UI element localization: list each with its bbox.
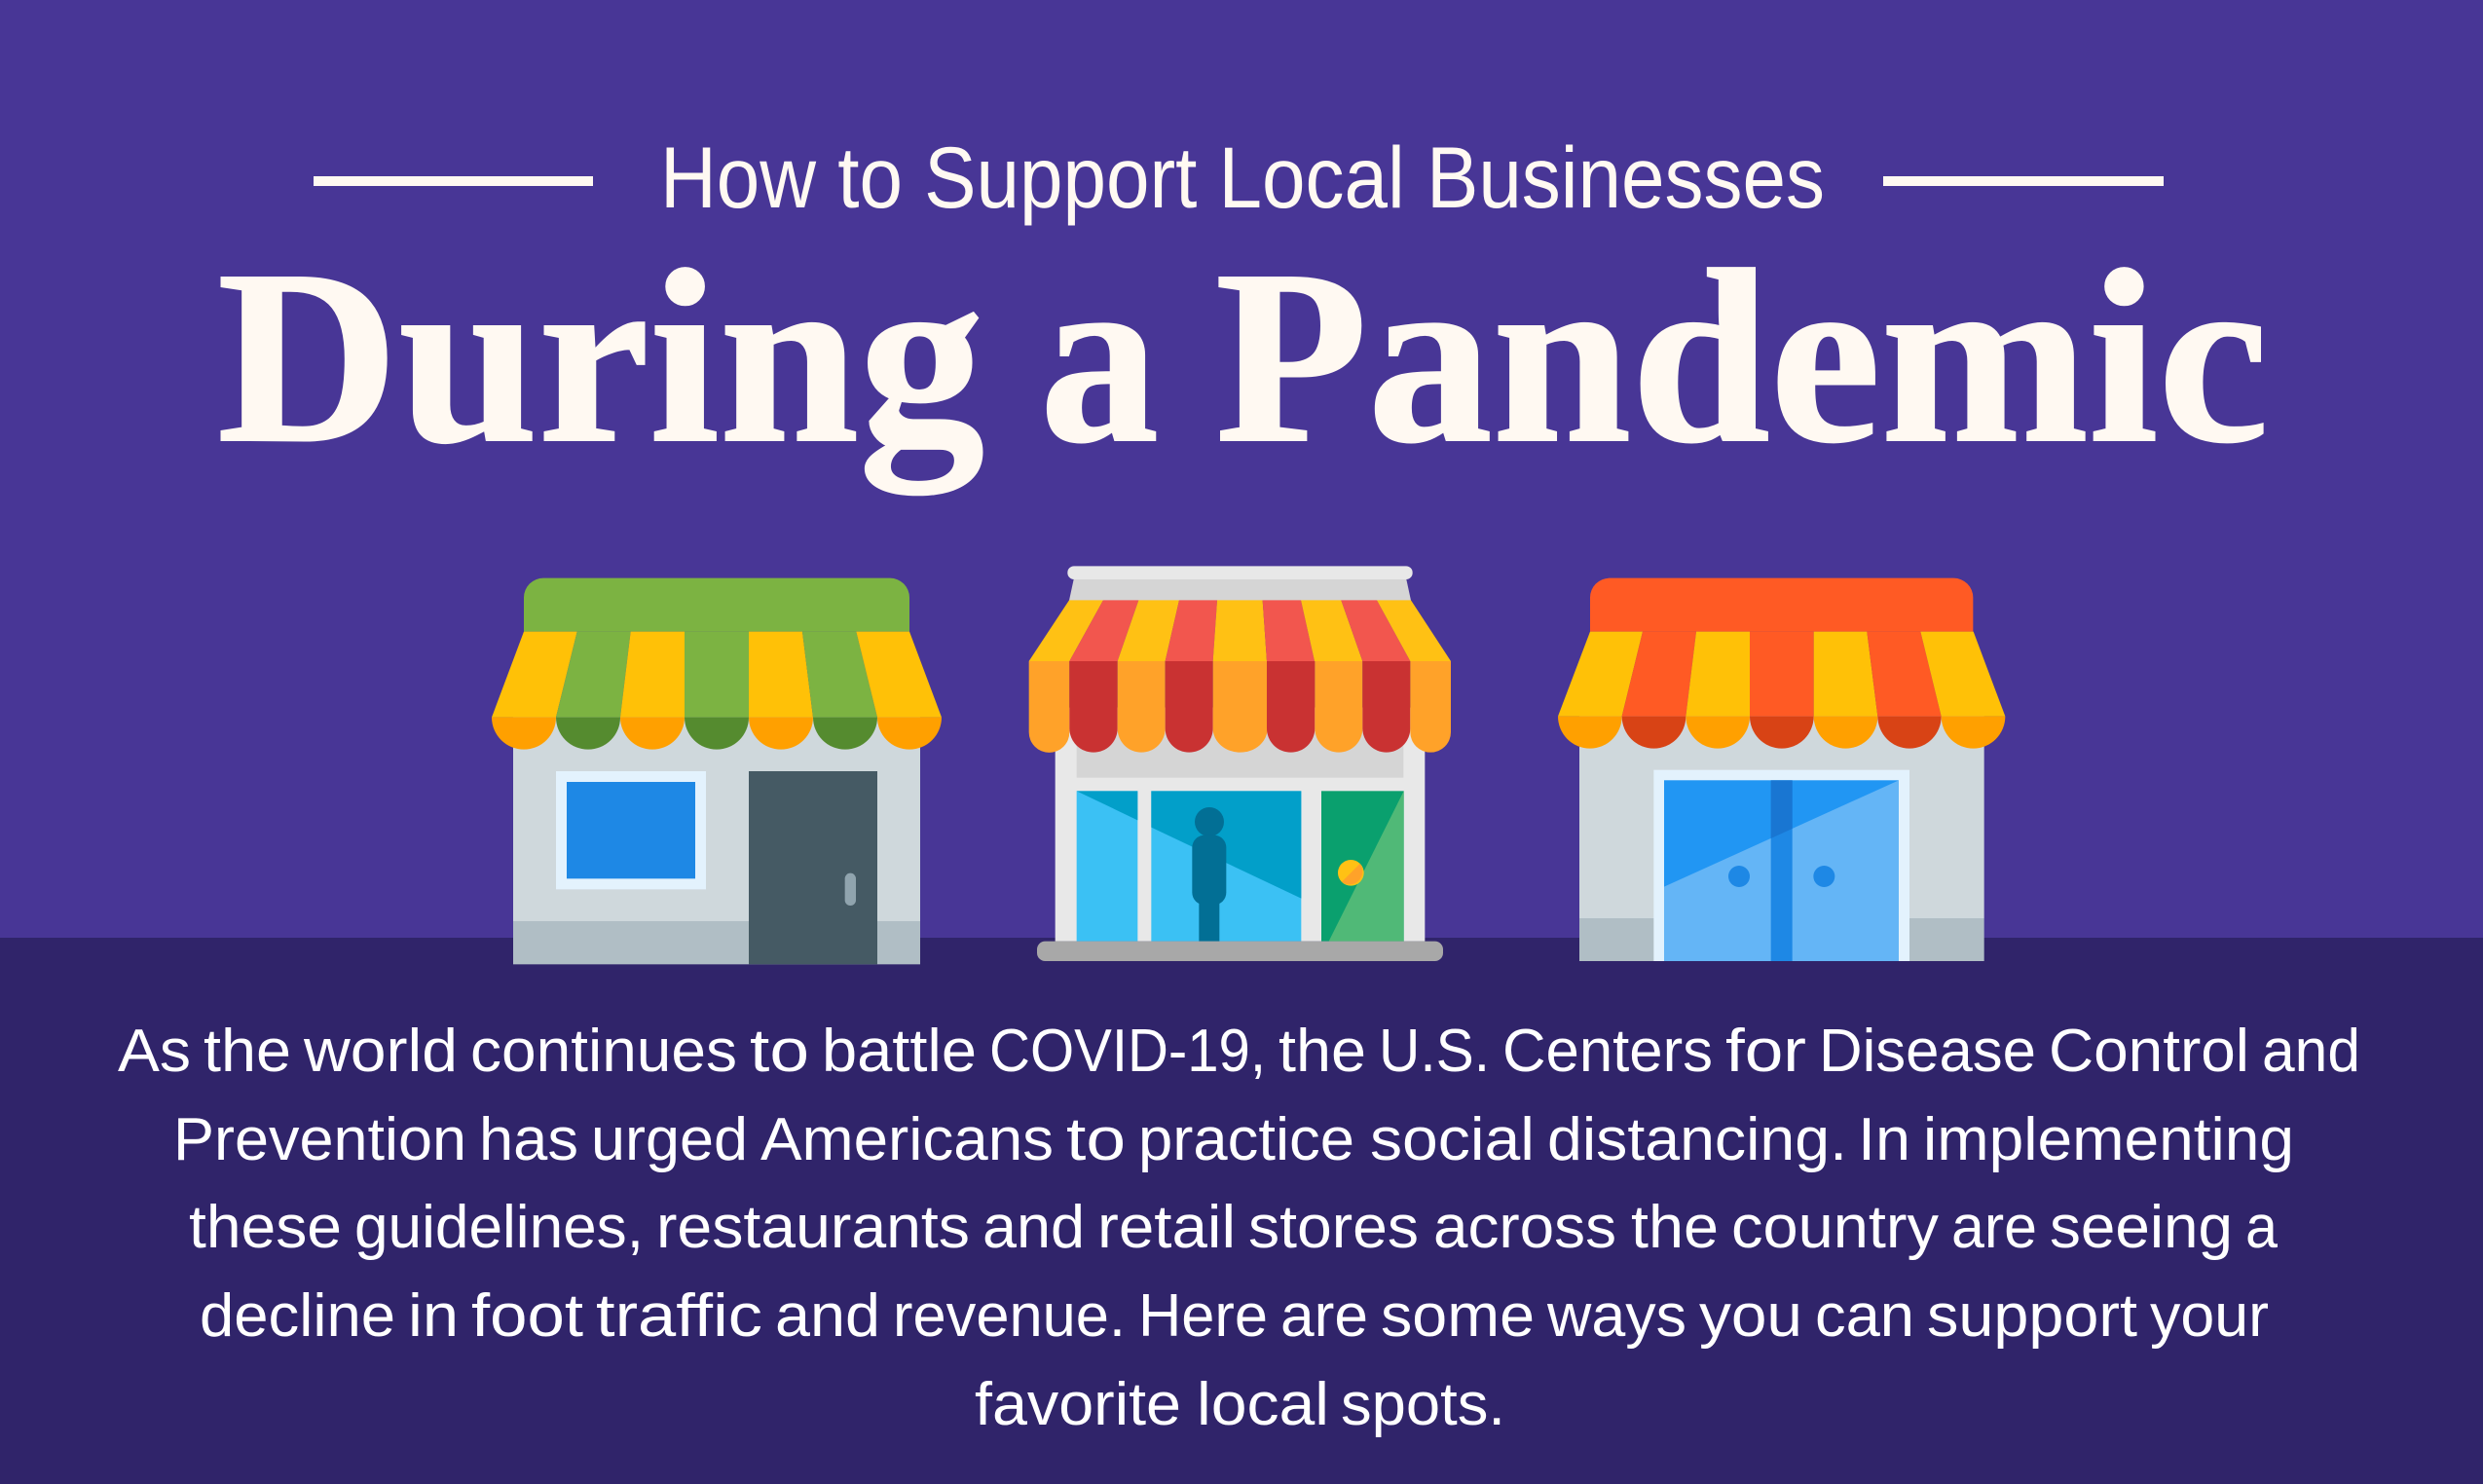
- heading: subtitle with side rules: How to Support Local Businesses: [660, 129, 1825, 226]
- text block: introduction paragraph: distancing.: [1547, 1106, 1847, 1173]
- text block: introduction paragraph: the: [1631, 1194, 1719, 1261]
- text block: introduction paragraph: you: [1699, 1282, 1802, 1350]
- text block: introduction paragraph: has: [479, 1106, 578, 1173]
- awning stripes: [492, 632, 942, 750]
- text block: introduction paragraph: retail: [1097, 1194, 1236, 1261]
- text block: introduction paragraph: seeing: [2050, 1194, 2233, 1261]
- text block: introduction paragraph: your: [2150, 1282, 2269, 1350]
- title: During a Pandemic: [217, 220, 2269, 495]
- icon: green storefront: [492, 578, 942, 964]
- text block: introduction paragraph: to: [750, 1018, 809, 1085]
- double glass door: [1653, 770, 1909, 961]
- door: [749, 771, 877, 964]
- text block: introduction paragraph: are: [1280, 1282, 1368, 1350]
- text block: introduction paragraph: restaurants: [656, 1194, 970, 1261]
- text block: introduction paragraph: revenue.: [893, 1282, 1126, 1350]
- green door: [1321, 791, 1404, 942]
- text block: introduction paragraph: continues: [470, 1018, 737, 1085]
- text block: introduction paragraph: practice: [1138, 1106, 1354, 1173]
- text block: introduction paragraph: world: [303, 1018, 458, 1085]
- text block: introduction paragraph: these: [189, 1194, 342, 1261]
- wall and base: [513, 718, 920, 964]
- roof sign: [524, 578, 909, 632]
- title: During a Pandemic: Pandemic: [1215, 220, 2269, 495]
- text block: introduction paragraph: In: [1858, 1106, 1910, 1173]
- text block: introduction paragraph: Here: [1138, 1282, 1268, 1350]
- text block: introduction paragraph: to: [1066, 1106, 1126, 1173]
- base step: [1037, 942, 1443, 961]
- text block: introduction paragraph: As: [118, 1018, 191, 1085]
- text block: introduction paragraph: guidelines,: [354, 1194, 644, 1261]
- text block: introduction paragraph: and: [775, 1282, 880, 1350]
- text block: introduction paragraph: foot: [471, 1282, 583, 1350]
- dark purple ground panel: [0, 938, 2483, 1484]
- text block: introduction paragraph: social: [1370, 1106, 1535, 1173]
- text block: introduction paragraph: favorite: [975, 1371, 1181, 1438]
- person silhouette: [1192, 807, 1226, 942]
- text block: introduction paragraph: support: [1927, 1282, 2137, 1350]
- text block: introduction paragraph: across: [1433, 1194, 1616, 1261]
- text block: introduction paragraph: Prevention: [173, 1106, 466, 1173]
- text block: introduction paragraph: and: [982, 1194, 1085, 1261]
- text block: introduction paragraph: urged: [591, 1106, 748, 1173]
- text block: introduction paragraph: Americans: [760, 1106, 1054, 1173]
- text block: introduction paragraph: in: [408, 1282, 459, 1350]
- text block: introduction paragraph: implementing: [1923, 1106, 2294, 1173]
- text block: introduction paragraph: decline: [200, 1282, 395, 1350]
- shop windows: [1077, 791, 1301, 942]
- roof cornice: [1067, 566, 1413, 601]
- text block: introduction paragraph: Disease: [1819, 1018, 2036, 1085]
- text block: introduction paragraph: stores: [1248, 1194, 1419, 1261]
- text block: introduction paragraph: Centers: [1502, 1018, 1713, 1085]
- roof sign: [1590, 578, 1973, 632]
- purple header background: [0, 0, 2483, 938]
- text block: introduction paragraph: for: [1725, 1018, 1806, 1085]
- title: During a Pandemic: During: [217, 220, 984, 495]
- building walls: [1056, 708, 1425, 942]
- text block: introduction paragraph: Control: [2049, 1018, 2249, 1085]
- title: During a Pandemic: a: [1040, 220, 1159, 495]
- text block: introduction paragraph: some: [1381, 1282, 1535, 1350]
- awning: [1029, 600, 1451, 753]
- awning stripes: [1558, 632, 2005, 749]
- text block: introduction paragraph: the: [1279, 1018, 1366, 1085]
- text block: introduction paragraph: the: [204, 1018, 291, 1085]
- icon: striped awning storefront: [1029, 566, 1451, 961]
- text block: introduction paragraph: local: [1197, 1371, 1329, 1438]
- text block: introduction paragraph: battle: [822, 1018, 977, 1085]
- icon: orange storefront: [1558, 578, 2005, 961]
- text block: introduction paragraph: COVID-19,: [989, 1018, 1266, 1085]
- text block: introduction paragraph: a: [2245, 1194, 2278, 1261]
- text block: introduction paragraph: can: [1815, 1282, 1914, 1350]
- text block: introduction paragraph: country: [1731, 1194, 1939, 1261]
- text block: introduction paragraph: U.S.: [1379, 1018, 1490, 1085]
- text block: introduction paragraph: ways: [1546, 1282, 1686, 1350]
- text block: introduction paragraph: [118, 1018, 2360, 1438]
- window: [556, 771, 706, 889]
- text block: introduction paragraph: spots.: [1341, 1371, 1505, 1438]
- text block: introduction paragraph: and: [2262, 1018, 2360, 1085]
- text block: introduction paragraph: traffic: [596, 1282, 762, 1350]
- text block: introduction paragraph: are: [1951, 1194, 2037, 1261]
- wall and base: [1579, 717, 1984, 961]
